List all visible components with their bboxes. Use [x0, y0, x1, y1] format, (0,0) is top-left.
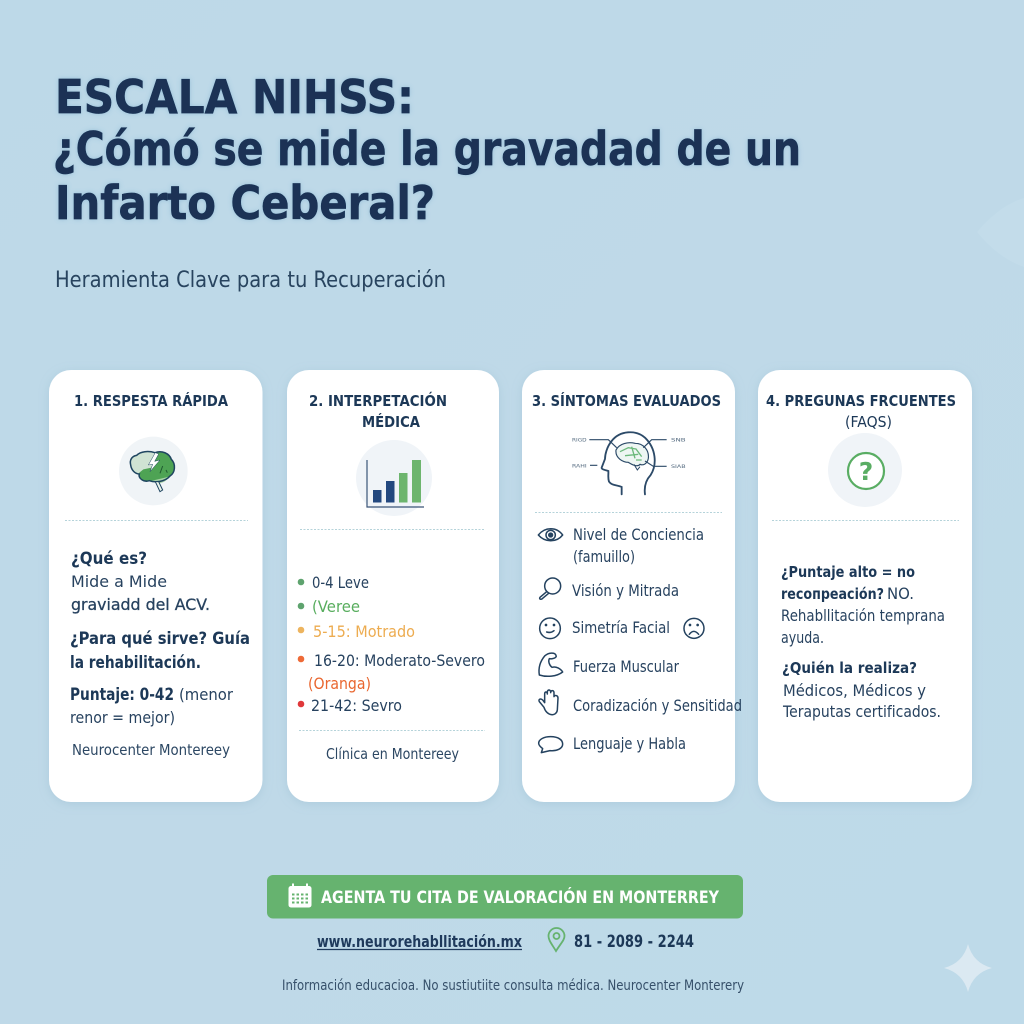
icon: question mark [828, 433, 902, 507]
text block: faqs: ayuda. [781, 628, 824, 647]
symptom list: Nivel de Conciencia [573, 525, 704, 544]
severity list: (Oranga) [308, 674, 371, 693]
text block: qué es: Mide a Mide [71, 572, 167, 591]
icon: magnifier [540, 578, 561, 599]
text block: qué es: ¿Para qué sirve? Guía [70, 629, 250, 648]
call to action button [267, 875, 743, 918]
decorative lens shape right edge [977, 198, 1024, 267]
website link: www.neurorehabllitación.mx [317, 932, 523, 951]
text block: faqs: ¿Quién la realiza? [782, 659, 917, 677]
footer note 2: Clínica en Montereey [326, 745, 459, 763]
title [53, 70, 801, 230]
text block: faqs: Rehabllitación temprana [781, 606, 945, 625]
icon: head with brain diagram [572, 432, 686, 494]
symptom icons [538, 529, 704, 753]
card background 4 [758, 370, 972, 802]
text block: faqs [781, 563, 945, 721]
text block: qué es: renor = mejor) [70, 708, 175, 727]
icon: smiling face [540, 618, 560, 639]
title: Infarto Ceberal? [55, 176, 435, 230]
heading 2: MÉDICA [362, 412, 420, 431]
panel: interpretación médica [287, 370, 499, 802]
icon: bar chart [356, 440, 432, 516]
call to action button: AGENTA TU CITA DE VALORACIÓN EN MONTERREY [321, 886, 720, 908]
severity list: 21-42: Sevro [311, 696, 402, 715]
symptom list: Fuerza Muscular [573, 657, 679, 676]
icon: head with brain diagram: SIAB [671, 464, 686, 470]
severity list: 0-4 Leve [312, 573, 369, 592]
heading 4: (FAQS) [845, 413, 892, 431]
subtitle: Heramienta Clave para tu Recuperación [55, 268, 446, 293]
icon: head with brain diagram: RAHI [572, 463, 587, 469]
icon: muscle [539, 653, 563, 676]
footer note 1: Neurocenter Montereey [72, 741, 230, 759]
decorative star [944, 944, 992, 992]
symptom list: Simetría Facial [572, 618, 670, 637]
heading 2 [309, 391, 447, 431]
severity list: 16-20: Moderato-Severo [314, 651, 485, 670]
text block: qué es: la rehabilitación. [70, 653, 201, 672]
heading 3: 3. SÍNTOMAS EVALUADOS [532, 391, 721, 410]
icon: question mark: ? [859, 457, 873, 486]
text block: faqs: Médicos, Médicos y [783, 681, 926, 700]
text block: qué es: Puntaje: 0-42 [70, 685, 174, 704]
icon: hand [539, 690, 558, 715]
symptom list: Lenguaje y Habla [573, 734, 686, 753]
severity list: (Veree [312, 597, 360, 616]
card background 3 [522, 370, 735, 802]
card background 2 [287, 370, 499, 802]
text block: faqs: recoпpeación? [781, 585, 884, 603]
panel: síntomas evaluados [522, 370, 742, 802]
icon: head with brain diagram: RIGD [572, 438, 587, 444]
symptom list: Visión y Mitrada [572, 581, 679, 600]
card background 1 [49, 370, 262, 802]
heading 2: 2. INTERPETACIÓN [309, 391, 447, 410]
panel: preguntas frecuentes [758, 370, 972, 802]
text block: faqs: NO. [887, 584, 914, 603]
phone number: 81 - 2089 - 2244 [574, 932, 694, 952]
symptom list: (famuillo) [573, 547, 635, 566]
icon: calendar [288, 884, 312, 908]
severity list [298, 573, 485, 715]
icon: brain [119, 437, 188, 505]
heading 4: 4. PREGUNAS FRCUENTES [766, 392, 956, 410]
heading 1: 1. RESPESTA RÁPIDA [74, 391, 228, 410]
icon: head with brain diagram: SNB [671, 438, 686, 444]
icon: speech bubble [539, 737, 563, 753]
severity list: 5-15: Motrado [313, 622, 415, 641]
panel: respuesta rápida [49, 370, 262, 802]
icon: sad face [684, 618, 704, 638]
symptom list [572, 525, 742, 753]
icon: location pin [548, 928, 564, 951]
disclaimer: Información educacioa. No sustiutiite consulta médica. Neurocenter Monterery [282, 978, 744, 994]
icon: eye [538, 529, 563, 541]
text block: faqs: Teraputas certificados. [782, 702, 941, 721]
text block: qué es: (menor [179, 685, 233, 704]
text block: faqs: ¿Puntaje alto = no [781, 563, 915, 581]
title: ESCALA NIHSS: [55, 70, 414, 124]
title: ¿Cómó se mide la gravadad de un [53, 122, 801, 176]
text block: qué es: ¿Qué es? [71, 549, 147, 568]
heading 4 [766, 392, 956, 431]
text block: qué es: graviadd del ACV. [71, 595, 210, 614]
text block: qué es [70, 549, 250, 727]
symptom list: Coradización y Sensitidad [573, 696, 742, 715]
